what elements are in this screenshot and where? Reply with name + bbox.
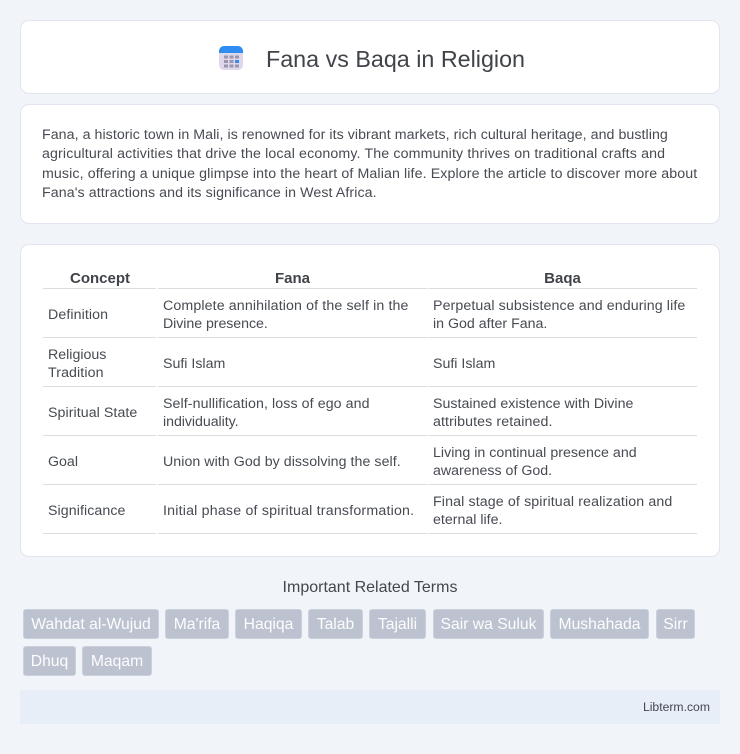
table header: Concept bbox=[70, 270, 130, 287]
row: Goal: Goal bbox=[48, 454, 78, 470]
row: Significance: Initial phase of spiritual transformation. bbox=[163, 503, 414, 519]
row: Spiritual State: Spiritual State bbox=[48, 405, 137, 421]
row: Religious Tradition: Tradition bbox=[48, 365, 104, 381]
row: Spiritual State bbox=[48, 396, 633, 430]
row: Significance bbox=[48, 494, 672, 528]
table header: Baqa bbox=[544, 270, 581, 287]
row: Spiritual State: individuality. bbox=[163, 414, 239, 430]
related term tags: Talab bbox=[317, 616, 354, 633]
footer bar bbox=[20, 690, 720, 724]
table header bbox=[70, 270, 581, 287]
row: Definition: Complete annihilation of the self in the bbox=[163, 298, 409, 314]
row: Religious Tradition: Religious bbox=[48, 347, 106, 363]
related term tags bbox=[23, 609, 695, 676]
related term tags: Ma'rifa bbox=[174, 616, 220, 633]
icon: calendar bbox=[219, 46, 243, 70]
related term tags: Mushahada bbox=[558, 616, 640, 633]
table header: Fana bbox=[275, 270, 310, 287]
row: Goal: awareness of God. bbox=[433, 463, 552, 479]
related term tags: Dhuq bbox=[31, 653, 68, 670]
intro paragraph: agricultural activities that drive the local economy. The community thrives on traditional crafts and bbox=[42, 146, 665, 162]
related term tags: Sirr bbox=[663, 616, 688, 633]
related term tags: Sair wa Suluk bbox=[441, 616, 536, 633]
row: Goal bbox=[48, 445, 637, 479]
table rule lines bbox=[43, 288, 697, 534]
panel: comparison table bbox=[20, 244, 720, 557]
heading: related terms: Important Related Terms bbox=[283, 579, 457, 596]
row: Definition: Divine presence. bbox=[163, 316, 268, 332]
row: Significance: Final stage of spiritual realization and bbox=[433, 494, 672, 510]
title: Fana vs Baqa in Religion bbox=[266, 46, 525, 72]
related term tags: Haqiqa bbox=[244, 616, 293, 633]
row: Spiritual State: Self-nullification, loss of ego and bbox=[163, 396, 370, 412]
panel: intro text bbox=[20, 104, 720, 224]
row: Definition: Perpetual subsistence and enduring life bbox=[433, 298, 685, 314]
row: Definition: in God after Fana. bbox=[433, 316, 547, 332]
row: Religious Tradition: Sufi Islam bbox=[433, 356, 495, 372]
row: Definition bbox=[48, 298, 685, 332]
row: Religious Tradition bbox=[48, 347, 495, 381]
related term tags: Tajalli bbox=[378, 616, 417, 633]
intro paragraph: Fana's attractions and its significance in West Africa. bbox=[42, 185, 377, 201]
row: Goal: Living in continual presence and bbox=[433, 445, 637, 461]
row: Significance: eternal life. bbox=[433, 512, 502, 528]
row: Definition: Definition bbox=[48, 307, 108, 323]
footer credit: Libterm.com bbox=[643, 700, 710, 714]
panel: header bbox=[20, 20, 720, 94]
intro paragraph: Fana, a historic town in Mali, is renowned for its vibrant markets, rich cultural heritage, and bustling bbox=[42, 127, 668, 143]
row: Significance: Significance bbox=[48, 503, 125, 519]
row: Spiritual State: attributes retained. bbox=[433, 414, 553, 430]
row: Goal: Union with God by dissolving the self. bbox=[163, 454, 401, 470]
intro paragraph: music, offering a unique glimpse into the heart of Malian life. Explore the article to discover more about bbox=[42, 166, 697, 182]
related term tags: Maqam bbox=[91, 653, 143, 670]
row: Spiritual State: Sustained existence with Divine bbox=[433, 396, 633, 412]
intro paragraph bbox=[42, 127, 698, 201]
row: Religious Tradition: Sufi Islam bbox=[163, 356, 225, 372]
related term tags: Wahdat al-Wujud bbox=[31, 616, 151, 633]
